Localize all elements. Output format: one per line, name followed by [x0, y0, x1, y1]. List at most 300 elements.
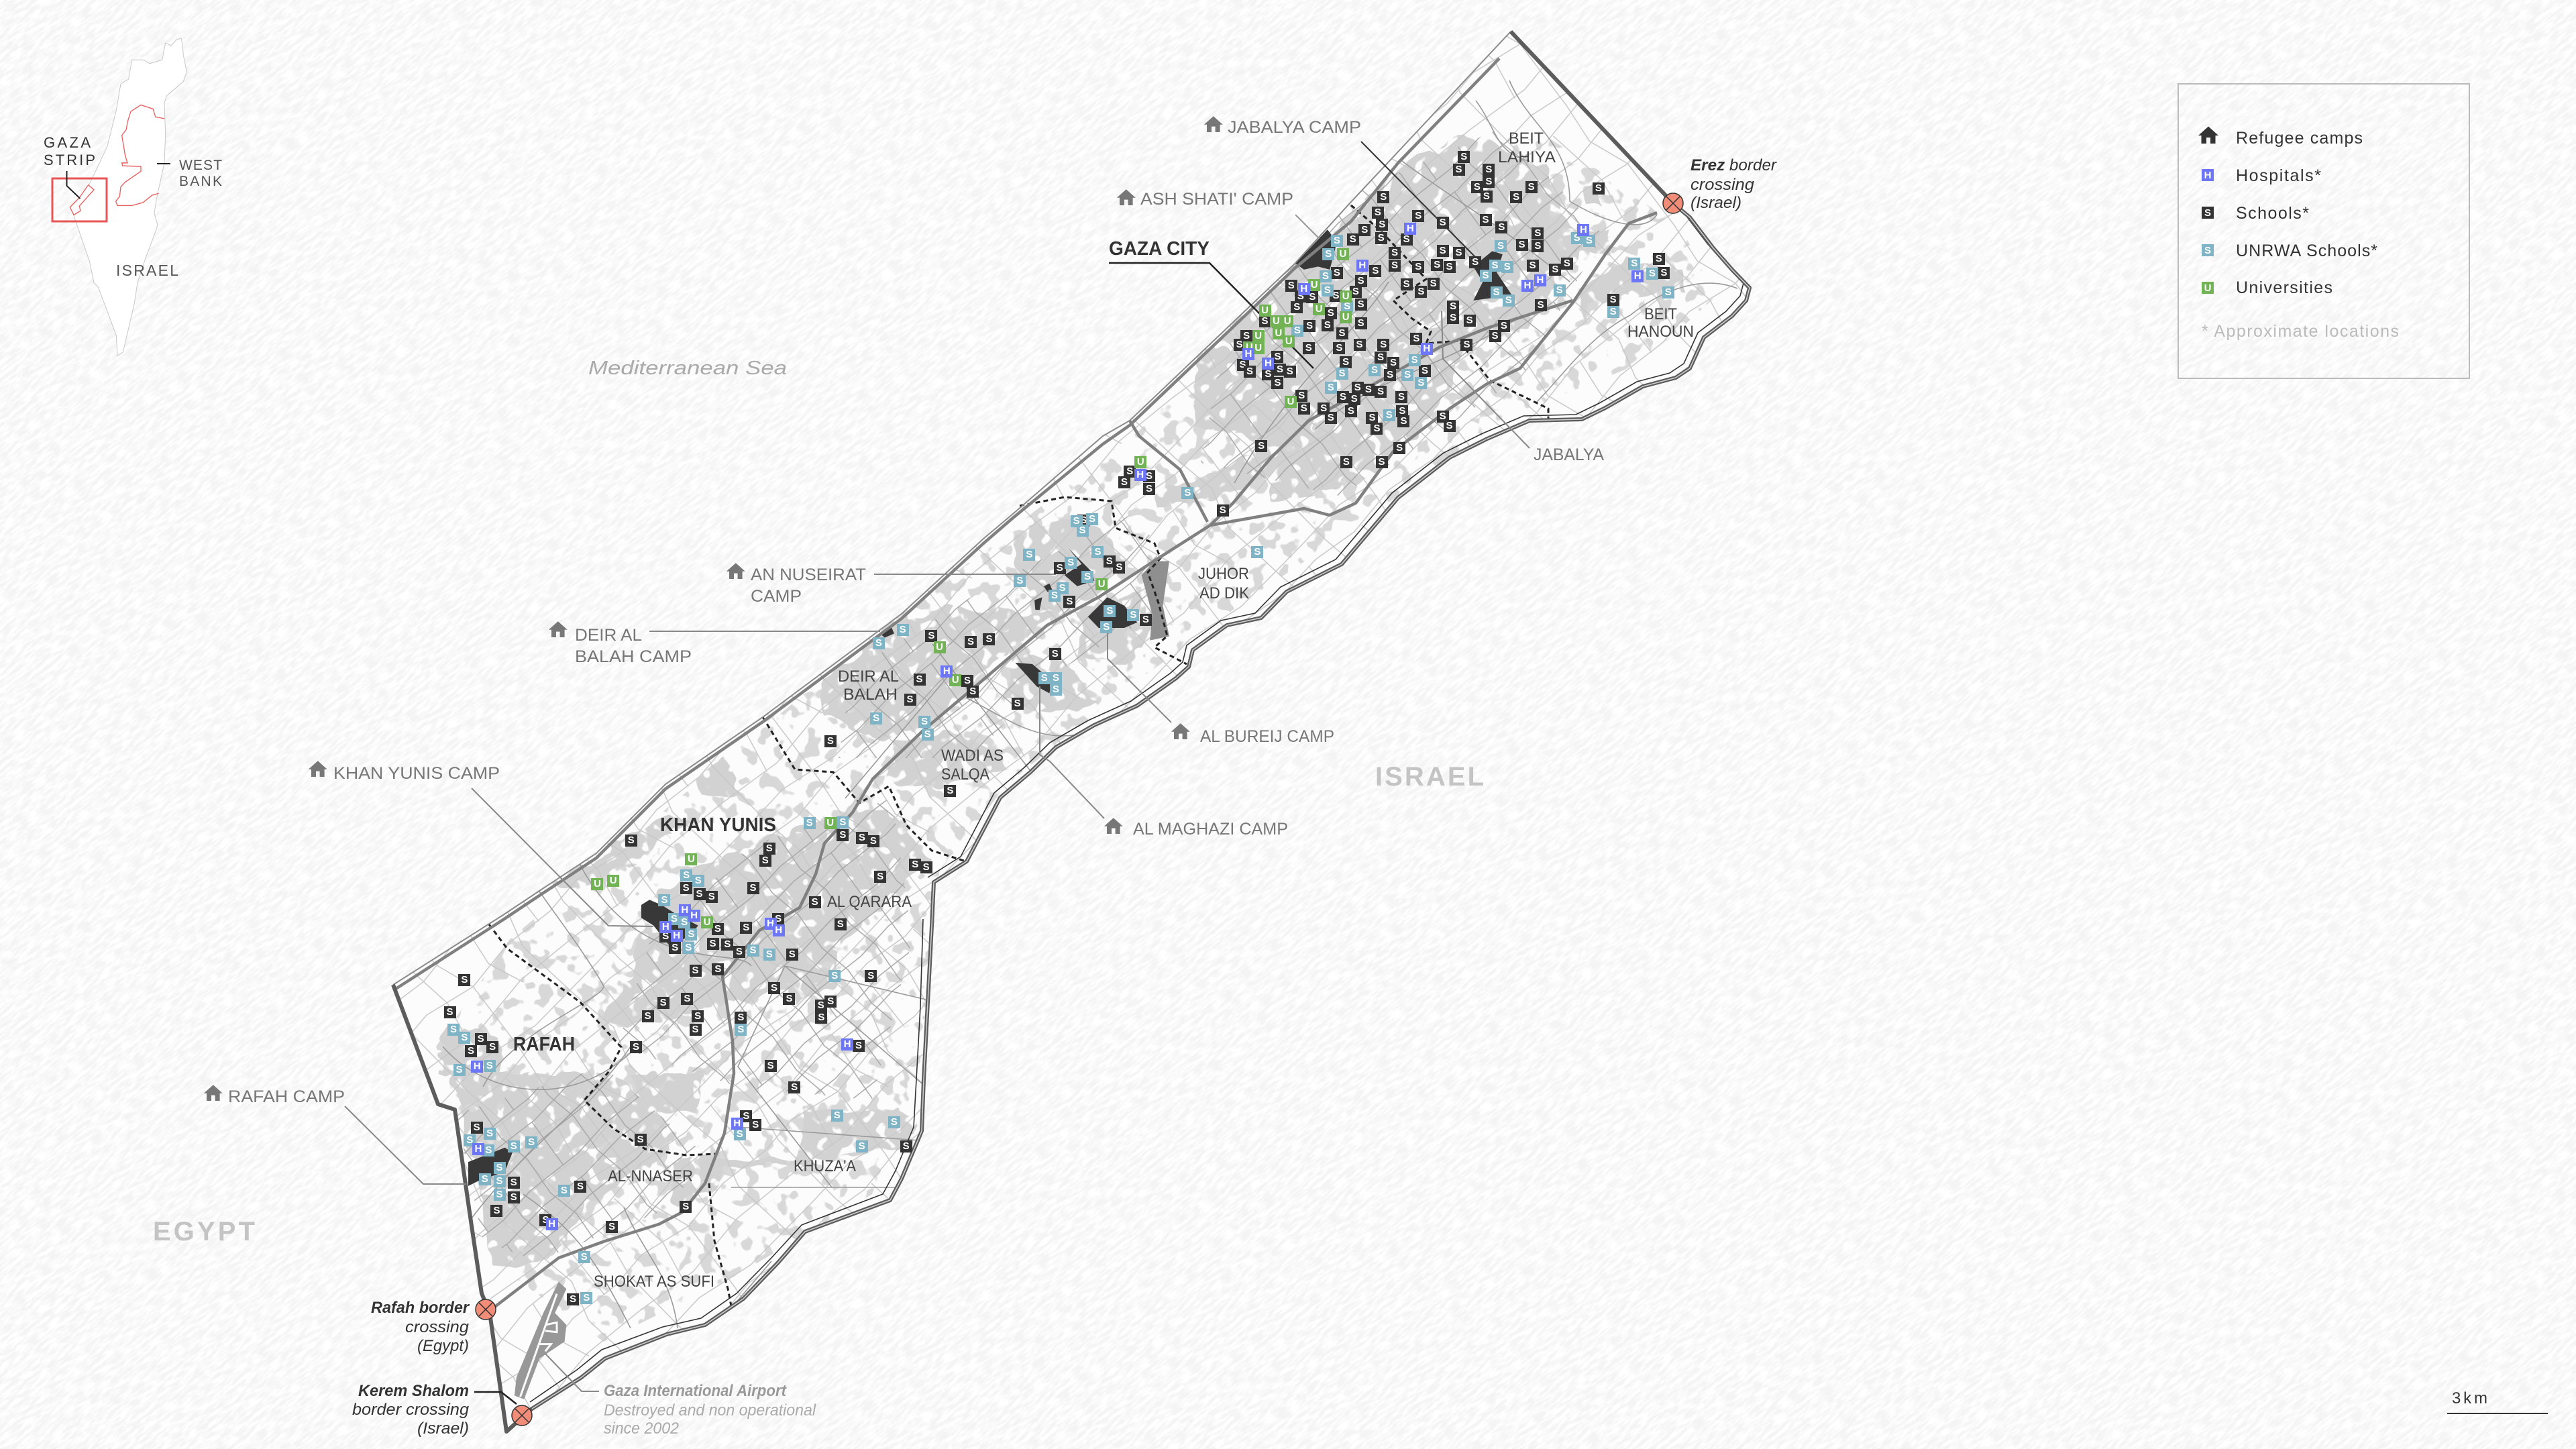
markers: Rafah facilities: H	[475, 1143, 482, 1155]
markers: Rafah facilities: S	[561, 1185, 568, 1196]
label: Erez border crossing	[1690, 156, 1777, 212]
markers: northern Gaza facilities: H	[1407, 223, 1414, 234]
label: Wadi as Salqa: WADI AS	[941, 747, 1004, 765]
markers: Rafah facilities: S	[791, 1081, 798, 1093]
markers: northern Gaza facilities: S	[1456, 247, 1462, 258]
markers: northern Gaza facilities: S	[1529, 260, 1536, 271]
markers: Khan Yunis facilities: S	[714, 963, 721, 975]
markers: northern Gaza facilities: S	[1332, 290, 1339, 301]
markers: northern Gaza facilities: S	[1377, 386, 1384, 397]
icon: Erez crossing	[1663, 193, 1683, 213]
markers: Khan Yunis facilities: S	[461, 974, 468, 985]
markers: Khan Yunis facilities: S	[685, 942, 692, 953]
markers: central Gaza facilities: H	[943, 665, 951, 677]
markers: northern Gaza facilities: S	[1379, 219, 1385, 230]
markers: northern Gaza facilities: H	[1300, 283, 1307, 294]
markers: northern Gaza facilities: S	[1450, 301, 1456, 312]
markers: Khan Yunis facilities: U	[594, 878, 601, 890]
markers: central Gaza facilities: S	[1066, 596, 1073, 607]
legend: universities: U	[2204, 282, 2211, 294]
label: Deir al Balah: DEIR AL	[838, 667, 899, 686]
markers: central Gaza facilities: S	[1026, 549, 1032, 560]
markers: northern Gaza facilities: S	[1336, 342, 1342, 354]
markers: northern Gaza facilities: S	[1440, 217, 1446, 228]
markers: northern Gaza facilities: S	[1534, 227, 1541, 239]
label: Rafah border crossing: Rafah border	[371, 1299, 470, 1317]
markers: Rafah facilities: S	[752, 1119, 759, 1130]
label: Egypt: EGYPT	[153, 1217, 255, 1246]
markers: Khan Yunis facilities: S	[695, 875, 702, 886]
markers: Rafah facilities: S	[511, 1177, 517, 1188]
label: Kerem Shalom border crossing: (Israel)	[417, 1419, 469, 1438]
markers: central Gaza facilities: S	[1016, 575, 1023, 586]
markers: Khan Yunis facilities: H	[681, 904, 688, 916]
markers: Khan Yunis facilities: S	[923, 861, 930, 873]
markers: Khan Yunis facilities: S	[468, 1045, 474, 1057]
legend: UNRWA schools: S	[2204, 245, 2211, 256]
markers: Khan Yunis facilities: U	[610, 875, 617, 886]
markers: northern Gaza facilities: S	[1274, 377, 1281, 388]
markers: Khan Yunis facilities: S	[766, 949, 773, 960]
markers: northern Gaza facilities: H	[1358, 260, 1366, 271]
coastline	[393, 32, 1511, 985]
markers: Rafah facilities: S	[570, 1293, 576, 1305]
markers: Rafah facilities: S	[834, 1110, 841, 1121]
label: Gaza International Airport: Gaza International Airport	[604, 1382, 787, 1400]
markers: northern Gaza facilities: S	[1243, 330, 1250, 341]
label: Khan Yunis Camp	[309, 761, 500, 783]
markers: northern Gaza facilities: U	[1342, 311, 1350, 323]
markers: northern Gaza facilities: U	[1287, 396, 1295, 407]
markers: central Gaza facilities: U	[952, 674, 959, 686]
markers: Khan Yunis facilities: S	[818, 1000, 824, 1011]
icon: Rafah crossing	[476, 1299, 496, 1320]
label: Jabalya Camp: JABALYA CAMP	[1228, 118, 1361, 137]
main roads	[493, 213, 1657, 1308]
refugee camp footprints	[468, 229, 1513, 1186]
label: Gaza City: GAZA CITY	[1109, 238, 1210, 260]
markers: northern Gaza facilities: S	[1350, 233, 1356, 245]
markers: Khan Yunis facilities: S	[812, 896, 818, 908]
legend: universities: Universities	[2236, 278, 2332, 297]
markers: central Gaza facilities: S	[1258, 440, 1265, 451]
markers: Khan Yunis facilities: S	[683, 869, 690, 881]
markers: northern Gaza facilities: S	[1513, 191, 1519, 203]
markers: Khan Yunis facilities: S	[737, 1012, 744, 1023]
markers: Khan Yunis facilities: S	[766, 843, 773, 854]
markers: Khan Yunis facilities: S	[708, 891, 715, 902]
markers: northern Gaza facilities: S	[1404, 369, 1411, 380]
label: Kerem Shalom border crossing: border crossing	[352, 1401, 470, 1419]
markers: northern Gaza facilities: S	[1472, 256, 1479, 268]
markers: Khan Yunis facilities: S	[489, 1041, 496, 1053]
label: Al Bureij Camp: AL BUREIJ CAMP	[1200, 727, 1334, 746]
markers: northern Gaza facilities: S	[1261, 315, 1269, 327]
legend: schools: Schools*	[2236, 204, 2309, 223]
markers: central Gaza facilities: S	[1059, 582, 1066, 594]
markers: central Gaza facilities: S	[1184, 487, 1191, 498]
markers: central Gaza facilities: S	[1073, 515, 1080, 527]
markers: central Gaza facilities: S	[1254, 546, 1260, 557]
markers: northern Gaza facilities: S	[1293, 301, 1300, 313]
markers: Khan Yunis facilities: S	[662, 930, 669, 942]
markers: northern Gaza facilities: S	[1483, 270, 1489, 281]
markers: Khan Yunis facilities: S	[645, 1010, 651, 1022]
markers: central Gaza facilities: S	[964, 675, 971, 686]
markers: northern Gaza facilities: S	[1334, 267, 1340, 278]
inset: West Bank outline	[116, 105, 164, 205]
markers: Khan Yunis facilities: H	[767, 918, 774, 929]
markers: Khan Yunis facilities: U	[704, 916, 711, 928]
markers: northern Gaza facilities: S	[1377, 352, 1384, 363]
markers: northern Gaza facilities: S	[1371, 364, 1378, 376]
markers: Khan Yunis facilities: S	[661, 894, 667, 906]
markers: central Gaza facilities: S	[1146, 483, 1152, 494]
markers: central Gaza facilities: S	[1121, 476, 1128, 488]
markers: central Gaza facilities: S	[1106, 555, 1113, 567]
markers: northern Gaza facilities: H	[1423, 343, 1430, 354]
markers: Khan Yunis facilities: H	[844, 1038, 851, 1050]
markers: northern Gaza facilities: S	[1368, 412, 1375, 423]
legend note: * Approximate locations	[2202, 322, 2399, 341]
markers: Khan Yunis facilities: S	[750, 945, 757, 956]
label: Rafah Camp: RAFAH CAMP	[228, 1087, 345, 1106]
markers: northern Gaza facilities: S	[1378, 232, 1385, 244]
markers: northern Gaza facilities: S	[1446, 261, 1453, 272]
markers: northern Gaza facilities: S	[1660, 267, 1667, 278]
label: Deir al Balah	[838, 667, 899, 704]
label: Deir al Balah Camp	[549, 621, 692, 666]
markers: northern Gaza facilities: S	[1505, 294, 1512, 306]
markers: northern Gaza facilities: S	[1538, 299, 1544, 311]
markers: Rafah facilities: S	[511, 1191, 517, 1203]
markers: northern Gaza facilities: S	[1240, 359, 1246, 370]
markers: northern Gaza facilities: S	[1344, 301, 1350, 312]
markers: Khan Yunis facilities: S	[827, 996, 834, 1007]
markers: northern Gaza facilities	[1234, 151, 1674, 468]
markers: northern Gaza facilities: S	[1399, 405, 1405, 417]
markers: Khan Yunis facilities: S	[743, 922, 749, 933]
markers: northern Gaza facilities: S	[1497, 240, 1504, 252]
markers: northern Gaza facilities: S	[1372, 265, 1379, 276]
markers: northern Gaza facilities: S	[1265, 368, 1271, 380]
markers: central Gaza facilities: U	[936, 641, 943, 653]
markers: central Gaza facilities: S	[1067, 557, 1074, 568]
scale label: 3km	[2452, 1389, 2487, 1407]
markers: Khan Yunis facilities: S	[750, 882, 757, 894]
markers: northern Gaza facilities: U	[1254, 330, 1262, 341]
label: Beit Hanoun: HANOUN	[1627, 323, 1694, 341]
markers: Rafah facilities: S	[903, 1140, 910, 1152]
markers: northern Gaza facilities: S	[1352, 286, 1359, 297]
markers: central Gaza facilities: S	[1089, 513, 1095, 525]
markers: northern Gaza facilities: S	[1564, 258, 1570, 269]
markers: Rafah facilities: S	[608, 1221, 615, 1232]
markers: northern Gaza facilities: S	[1306, 320, 1313, 331]
label: Erez border crossing: crossing	[1690, 176, 1755, 194]
markers: northern Gaza facilities: S	[1415, 261, 1421, 272]
icon: Kerem Shalom crossing	[512, 1405, 532, 1426]
markers: Khan Yunis facilities: S	[671, 913, 678, 924]
markers: Khan Yunis facilities: H	[673, 930, 680, 941]
label: Khan Yunis Camp: KHAN YUNIS CAMP	[333, 764, 500, 783]
label: Juhor ad Dik	[1198, 565, 1249, 602]
markers: northern Gaza facilities: S	[1498, 221, 1505, 233]
markers: Rafah facilities: S	[493, 1205, 500, 1216]
markers: Khan Yunis facilities: S	[762, 855, 769, 866]
markers: Khan Yunis facilities: S	[683, 882, 690, 894]
markers: northern Gaza facilities: S	[1343, 456, 1350, 468]
markers: Khan Yunis facilities: S	[789, 949, 796, 960]
markers: Khan Yunis facilities: S	[724, 938, 731, 950]
markers: Khan Yunis facilities: S	[478, 1033, 484, 1044]
markers: northern Gaza facilities: S	[1301, 402, 1307, 414]
markers: northern Gaza facilities: U	[1342, 290, 1350, 302]
markers: northern Gaza facilities: S	[1380, 191, 1387, 203]
markers: central Gaza facilities: S	[1106, 605, 1113, 616]
markers: central Gaza facilities: S	[1079, 525, 1086, 536]
markers: northern Gaza facilities: S	[1483, 214, 1489, 225]
markers: northern Gaza facilities: S	[1474, 181, 1481, 193]
markers: northern Gaza facilities: S	[1403, 278, 1410, 290]
markers: Rafah facilities: S	[496, 1189, 503, 1200]
markers: northern Gaza facilities: S	[1440, 411, 1446, 421]
markers: northern Gaza facilities: S	[1320, 402, 1327, 414]
markers: Khan Yunis facilities: S	[806, 817, 813, 828]
markers: northern Gaza facilities: S	[1493, 286, 1500, 298]
markers: Khan Yunis facilities: H	[690, 910, 698, 921]
label: Beit Lahiya: LAHIYA	[1498, 148, 1556, 166]
markers: Khan Yunis facilities: S	[831, 970, 838, 981]
markers: Khan Yunis facilities: S	[818, 1012, 824, 1023]
markers: northern Gaza facilities: S	[1631, 258, 1638, 269]
inset label: West Bank: BANK	[179, 174, 222, 189]
legend: hospitals: Hospitals*	[2236, 166, 2321, 185]
markers: northern Gaza facilities: S	[1492, 260, 1499, 271]
markers: northern Gaza facilities: S	[1340, 391, 1346, 402]
markers: northern Gaza facilities: S	[1504, 261, 1511, 272]
markers: Khan Yunis facilities: S	[660, 997, 667, 1008]
markers: central Gaza facilities: S	[1053, 672, 1059, 684]
markers: northern Gaza facilities: S	[1277, 364, 1283, 375]
markers: central Gaza facilities: U	[1098, 578, 1106, 590]
markers: central Gaza facilities: S	[1051, 590, 1058, 601]
markers: central Gaza facilities: S	[1052, 648, 1059, 659]
markers: northern Gaza facilities: H	[1580, 224, 1587, 235]
label: Gaza International Airport: Destroyed and non operational	[604, 1401, 816, 1419]
markers: northern Gaza facilities: S	[1586, 235, 1593, 246]
markers: northern Gaza facilities: S	[1358, 317, 1364, 329]
markers: Khan Yunis facilities: H	[775, 924, 782, 936]
markers: central Gaza facilities: S	[1094, 546, 1101, 557]
markers: northern Gaza facilities: S	[1294, 325, 1301, 336]
markers: Khan Yunis facilities: S	[694, 1010, 701, 1022]
markers: Khan Yunis facilities: S	[771, 982, 777, 994]
markers: Khan Yunis facilities: S	[839, 816, 846, 828]
markers: Rafah facilities: S	[859, 1140, 865, 1152]
label: Erez border crossing: Erez border	[1690, 156, 1777, 174]
label: Rafah border crossing: (Egypt)	[417, 1337, 469, 1355]
markers: northern Gaza facilities: S	[1386, 409, 1393, 421]
markers: northern Gaza facilities: S	[1440, 245, 1446, 256]
markers: central Gaza facilities: S	[1130, 609, 1136, 621]
markers: northern Gaza facilities: S	[1595, 182, 1602, 194]
label: Wadi as Salqa	[941, 747, 1004, 784]
markers: northern Gaza facilities: S	[1610, 306, 1617, 317]
label: Al Qarara: AL QARARA	[827, 893, 912, 911]
markers: Rafah facilities: S	[496, 1175, 503, 1187]
markers: northern Gaza facilities: S	[1463, 339, 1470, 350]
markers: central Gaza facilities: S	[928, 630, 934, 641]
markers: northern Gaza facilities: S	[1556, 284, 1563, 296]
label: Rafah Camp	[204, 1085, 345, 1106]
markers: Khan Yunis facilities: S	[867, 970, 874, 981]
legend: refugee camps	[2198, 126, 2363, 148]
leader lines	[345, 142, 1529, 1404]
markers: Rafah facilities: S	[682, 1201, 689, 1212]
markers: northern Gaza facilities: S	[1398, 391, 1405, 402]
legend: UNRWA schools: UNRWA Schools*	[2236, 241, 2377, 260]
markers: northern Gaza facilities: S	[1324, 284, 1331, 296]
markers: northern Gaza facilities: S	[1342, 356, 1349, 368]
markers: northern Gaza facilities: S	[1391, 247, 1398, 258]
markers: Khan Yunis facilities: S	[692, 1024, 699, 1035]
markers: northern Gaza facilities: H	[1265, 358, 1272, 369]
markers: Khan Yunis facilities: U	[826, 817, 834, 828]
markers: central Gaza facilities: S	[873, 712, 879, 724]
markers: central Gaza facilities: S	[827, 735, 834, 747]
label: Khan Yunis: KHAN YUNIS	[660, 814, 776, 836]
markers: northern Gaza facilities: S	[1358, 299, 1364, 310]
markers: northern Gaza facilities: S	[1656, 253, 1662, 264]
markers: northern Gaza facilities: S	[1378, 456, 1385, 468]
markers: northern Gaza facilities: S	[1328, 307, 1334, 319]
inner thin security fence line	[928, 199, 1743, 877]
label: Kerem Shalom border crossing	[352, 1382, 470, 1438]
markers: northern Gaza facilities: S	[1380, 339, 1387, 350]
inset label: Israel: ISRAEL	[116, 262, 178, 279]
inset: Israel silhouette	[74, 38, 186, 356]
land area	[393, 32, 1750, 1432]
markers: northern Gaza facilities: S	[1483, 191, 1490, 202]
markers: northern Gaza facilities: S	[1324, 319, 1331, 331]
markers: northern Gaza facilities: S	[1552, 264, 1558, 275]
markers: northern Gaza facilities: S	[1391, 260, 1398, 271]
markers: Khan Yunis facilities: S	[461, 1032, 468, 1043]
markers: Rafah facilities: S	[891, 1116, 898, 1128]
markers: northern Gaza facilities: S	[1534, 240, 1541, 252]
markers: Rafah facilities: S	[583, 1292, 590, 1303]
legend: schools	[2202, 204, 2309, 223]
markers: northern Gaza facilities: U	[1311, 279, 1318, 290]
inset label: West Bank	[179, 158, 222, 189]
markers: northern Gaza facilities: S	[1417, 377, 1424, 388]
markers: central Gaza facilities: S	[985, 633, 992, 645]
markers: northern Gaza facilities: S	[1358, 275, 1364, 286]
markers: northern Gaza facilities: U	[1285, 335, 1293, 347]
markers: Khan Yunis facilities: H	[474, 1061, 481, 1072]
markers: northern Gaza facilities: S	[1287, 366, 1293, 377]
markers: Khan Yunis facilities: S	[633, 1041, 639, 1053]
markers: Khan Yunis facilities: S	[855, 1040, 862, 1051]
markers: northern Gaza facilities: U	[1316, 303, 1323, 315]
markers: northern Gaza facilities: S	[1574, 232, 1580, 244]
markers: central Gaza facilities: S	[1142, 614, 1149, 625]
label: Rafah border crossing: crossing	[405, 1318, 470, 1336]
markers: Khan Yunis facilities	[444, 785, 956, 1076]
markers: northern Gaza facilities: S	[1400, 415, 1407, 427]
coastal road	[396, 58, 1499, 989]
markers: northern Gaza facilities: U	[1284, 315, 1291, 327]
legend	[2178, 84, 2469, 378]
markers: Khan Yunis facilities: S	[447, 1006, 453, 1018]
built-up areas	[438, 134, 1685, 1270]
label: Deir al Balah Camp: DEIR AL	[575, 626, 642, 645]
markers: northern Gaza facilities: S	[1361, 224, 1368, 235]
markers: northern Gaza facilities: S	[1339, 368, 1346, 379]
markers: Rafah facilities: S	[486, 1128, 493, 1139]
label: Deir al Balah Camp: BALAH CAMP	[575, 647, 692, 666]
markers: Khan Yunis facilities: S	[486, 1060, 493, 1071]
label: Gaza International Airport	[604, 1382, 816, 1438]
markers: Khan Yunis facilities: S	[839, 829, 846, 841]
markers: northern Gaza facilities: S	[1334, 235, 1340, 246]
markers: northern Gaza facilities: S	[1375, 207, 1381, 218]
markers: Khan Yunis facilities: S	[737, 1024, 744, 1035]
legend: refugee camps: Refugee camps	[2236, 129, 2363, 148]
markers: northern Gaza facilities: S	[1528, 181, 1535, 193]
markers: northern Gaza facilities: S	[1236, 339, 1243, 350]
markers: northern Gaza facilities: H	[1536, 274, 1544, 286]
markers: Khan Yunis facilities: S	[870, 835, 877, 847]
map: Gaza Strip	[377, 30, 1752, 1434]
minor roads	[443, 80, 1737, 1328]
markers: northern Gaza facilities: S	[1288, 280, 1295, 291]
markers: Rafah facilities: S	[482, 1173, 488, 1185]
markers: northern Gaza facilities: S	[1387, 369, 1393, 380]
governorate boundaries, dashed	[489, 205, 1548, 1309]
markers: northern Gaza facilities: S	[1649, 268, 1656, 279]
markers: central Gaza facilities: S	[900, 624, 906, 635]
markers: Khan Yunis facilities: H	[662, 921, 669, 932]
dark wadi area near Juhor ad Dik	[1142, 561, 1169, 641]
markers: Khan Yunis facilities: S	[786, 993, 792, 1004]
markers: northern Gaza facilities: S	[1434, 259, 1440, 270]
markers: northern Gaza facilities: S	[1411, 354, 1418, 366]
markers: northern Gaza facilities: S	[1403, 233, 1410, 245]
label: An Nuseirat Camp	[727, 563, 866, 606]
label: Al Maghazi Camp: AL MAGHAZI CAMP	[1133, 820, 1288, 839]
markers: northern Gaza facilities: S	[1450, 312, 1456, 323]
markers: Rafah facilities	[464, 1081, 912, 1305]
markers: northern Gaza facilities: S	[1339, 327, 1346, 339]
markers: northern Gaza facilities: S	[1456, 164, 1462, 175]
markers: Khan Yunis facilities: S	[684, 993, 690, 1004]
markers: northern Gaza facilities: S	[1415, 210, 1421, 221]
markers: northern Gaza facilities: S	[1309, 291, 1316, 303]
markers: northern Gaza facilities: S	[1298, 390, 1305, 401]
label: Mediterranean Sea: Mediterranean Sea	[588, 358, 787, 379]
markers: northern Gaza facilities: U	[1246, 341, 1253, 353]
markers: Khan Yunis facilities: S	[775, 913, 782, 924]
markers: northern Gaza facilities: S	[1351, 393, 1358, 405]
border fence highlight	[532, 203, 1750, 1409]
markers: northern Gaza facilities: S	[1297, 290, 1304, 302]
markers: Khan Yunis facilities: S	[767, 1060, 774, 1071]
markers: central Gaza facilities: S	[924, 729, 931, 740]
markers: Khan Yunis facilities: S	[628, 835, 635, 846]
markers: Khan Yunis facilities: S	[688, 928, 694, 940]
